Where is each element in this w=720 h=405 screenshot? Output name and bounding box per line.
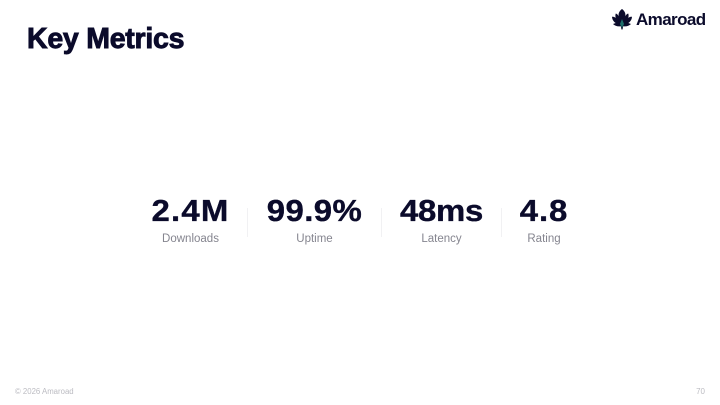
metric: uptime	[267, 194, 362, 245]
metrics row	[152, 194, 568, 245]
metric: downloads	[152, 194, 229, 245]
divider	[247, 208, 248, 237]
value: 4.8	[520, 194, 568, 228]
label: Latency	[421, 233, 462, 245]
wordmark: Amaroad	[636, 10, 706, 29]
divider	[501, 208, 502, 237]
label: Downloads	[162, 233, 219, 245]
icon: maple leaf	[612, 9, 632, 30]
label: Rating	[527, 233, 561, 245]
divider	[381, 208, 382, 237]
label: Uptime	[296, 233, 333, 245]
footer copyright: © 2026 Amaroad	[15, 387, 74, 396]
value: 99.9%	[267, 194, 362, 228]
value: 2.4M	[152, 194, 229, 228]
logo: Amaroad	[612, 9, 706, 30]
page number: 70	[696, 387, 705, 396]
value: 48ms	[400, 194, 483, 228]
metric: latency	[400, 194, 483, 245]
title: Key Metrics	[27, 23, 184, 55]
metric: rating	[520, 194, 568, 245]
